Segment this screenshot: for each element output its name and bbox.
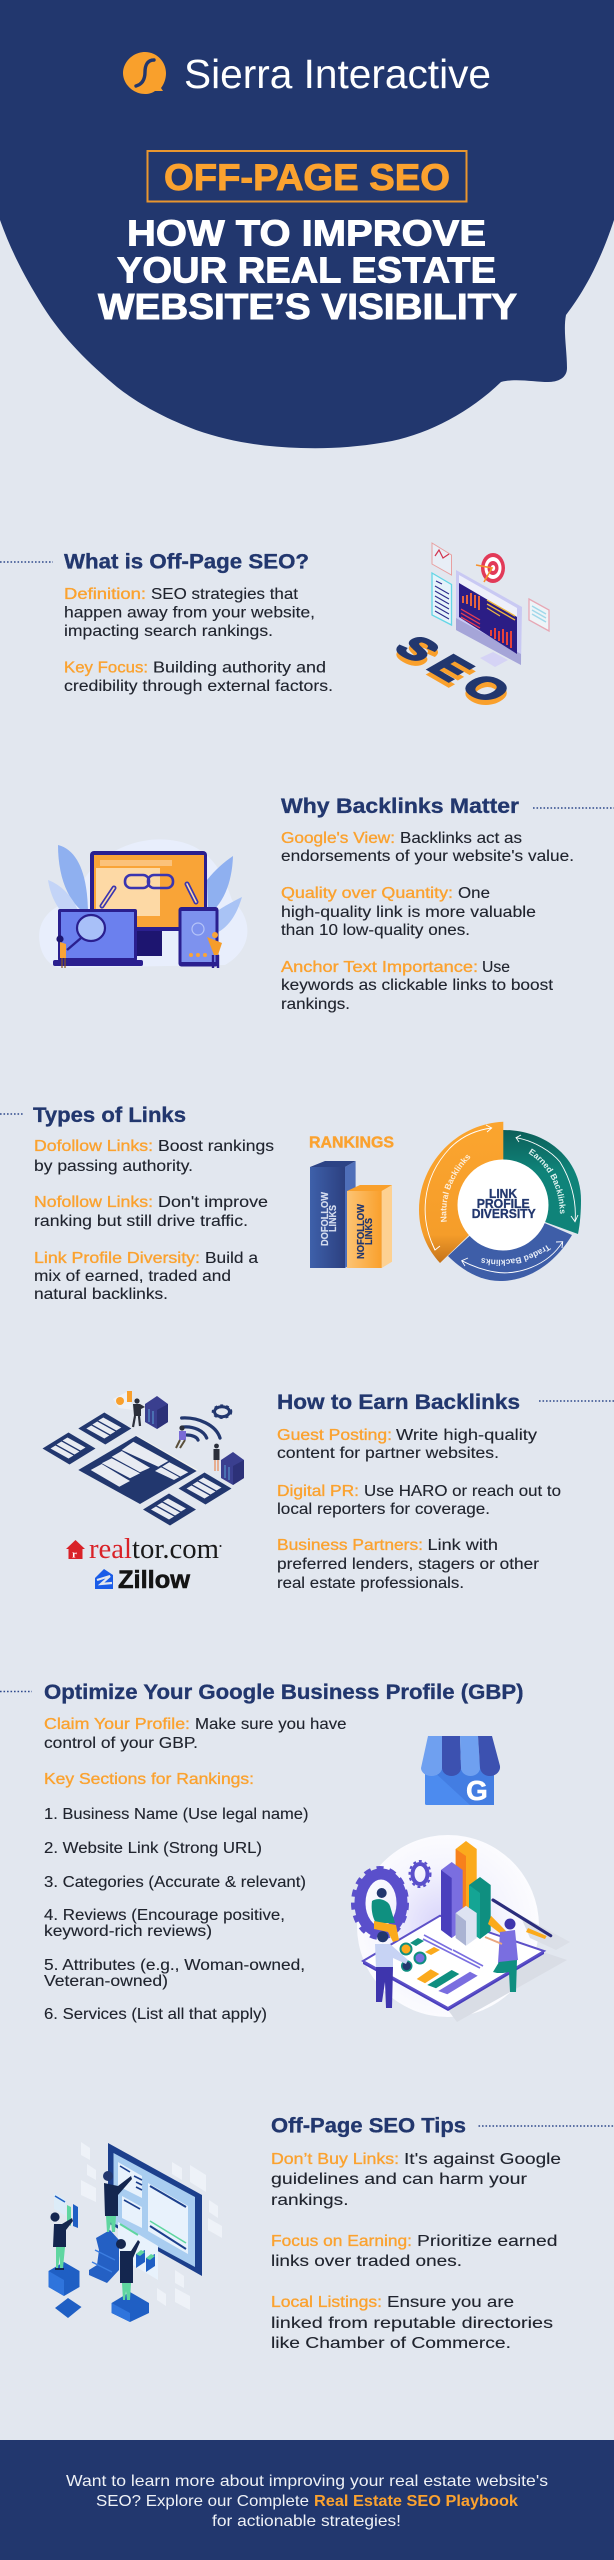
anchor text importance text: rankings. [281,996,350,1013]
badge: off-page seo: OFF-PAGE SEO [164,157,450,198]
small gear [410,1861,430,1887]
claim your profile text [44,1716,347,1752]
numbered list: 2. Website Link (Strong URL) [44,1840,262,1857]
wheel centre label: DIVERSITY [472,1207,536,1221]
illustration: linked devices [39,839,247,968]
label: earned backlinks: Earned Backlinks [528,1148,566,1214]
chart: rankings bars: LINKS [328,1205,339,1232]
illustration: team at big screen [48,2142,222,2322]
wheel centre label [472,1187,536,1221]
numbered list: keyword-rich reviews) [44,1923,212,1940]
header panel [0,0,614,448]
nofollow text: Nofollow Links: [34,1194,153,1211]
numbered list: 6. Services (List all that apply) [44,2006,267,2023]
guest posting text: Write high-quality [396,1427,537,1444]
heading: Optimize Your Google Business Profile (GBP) [44,1680,524,1704]
anchor text importance text: Use [482,959,510,976]
seo 3d letters: SEO [383,630,521,709]
key focus text [64,660,333,695]
person: standing right [485,1918,518,1992]
numbered list [44,1806,308,2023]
focus on earning text [271,2233,558,2270]
definition text: SEO strategies that [151,586,299,603]
section: why backlinks matter [39,794,614,1013]
numbered list: 1. Business Name (Use legal name) [44,1806,308,1823]
focus on earning text: links over traded ones. [271,2253,462,2270]
link profile diversity text: Link Profile Diversity: [34,1250,200,1267]
don't buy links text: rankings. [271,2192,348,2209]
numbered list: Veteran-owned) [44,1973,168,1990]
person: seated with laptop [176,1425,186,1448]
business partners text: real estate professionals. [277,1575,464,1592]
anchor text importance text [281,959,554,1013]
person: sitting analyst [372,1888,399,1942]
business partners text: preferred lenders, stagers or other [277,1556,540,1573]
footer call to action text [66,2473,548,2530]
icon: google business store [421,1736,500,1806]
heading: Why Backlinks Matter [281,794,520,818]
illustration: isometric network [42,1391,244,1526]
logo: realtor.com: tor.com [132,1534,219,1565]
link profile diversity text: Build a [205,1250,258,1267]
local listings text: Ensure you are [387,2294,514,2311]
key focus text: Building authority and [153,660,326,676]
main title: HOW TO IMPROVE [127,212,486,254]
nofollow text: Don't improve [158,1194,268,1211]
heading: What is Off-Page SEO? [64,550,309,574]
google's view text: endorsements of your website's value. [281,848,574,865]
person: on stairs [103,2171,132,2232]
business partners text [277,1537,540,1592]
logo: zillow: Zillow [118,1566,191,1594]
section: what is off-page seo [0,543,549,714]
section: google business profile [0,1680,570,2023]
don't buy links text: Don’t Buy Links: [271,2151,399,2168]
local listings text: like Chamber of Commerce. [271,2335,511,2352]
claim your profile text: control of your GBP. [44,1735,198,1752]
footer call to action text: for actionable strategies! [212,2513,401,2530]
digital pr text: Digital PR: [277,1483,359,1500]
numbered list: 4. Reviews (Encourage positive, [44,1907,285,1924]
navy speech-bubble shape [0,0,614,448]
don't buy links text: guidelines and can harm your [271,2171,528,2188]
wheel centre label: LINK [489,1187,517,1201]
label: natural backlinks: Natural Backlinks [440,1154,470,1222]
heading: Types of Links [33,1103,186,1127]
footer call to action text: SEO? Explore our Complete [96,2493,309,2510]
small held card [54,2193,78,2228]
main title [98,212,517,327]
logo: realtor.com [66,1534,222,1565]
quality over quantity text: One [458,885,490,902]
person: standing woman [214,1444,220,1471]
business partners text: Business Partners: [277,1537,423,1554]
link profile diversity text [34,1250,258,1303]
definition text: Definition: [64,586,146,603]
definition text: happen away from your website, [64,604,315,622]
nofollow text: ranking but still drive traffic. [34,1213,248,1230]
wheel centre label: PROFILE [477,1197,530,1211]
definition text [64,586,315,640]
person: businessman [133,1398,145,1427]
business partners text: Link with [428,1537,498,1554]
section: types of links [0,1103,581,1303]
quality over quantity text: high-quality link is more valuable [281,904,536,921]
numbered list: 5. Attributes (e.g., Woman-owned, [44,1957,305,1974]
chart: link profile diversity wheel [419,1122,581,1281]
footer call to action text: Real Estate SEO Playbook [314,2493,518,2510]
seo 3d letters: SEO [383,635,521,714]
definition text: impacting search rankings. [64,623,273,640]
logo wordmark: Sierra Interactive [184,51,491,97]
claim your profile text: Make sure you have [195,1716,347,1733]
digital pr text: Use HARO or reach out to [364,1483,561,1500]
don't buy links text [271,2151,561,2209]
illustration: analytics platform [353,1835,570,2022]
don't buy links text: It's against Google [404,2151,561,2168]
chart: rankings bars: LINKS [364,1218,375,1245]
digital pr text [277,1483,561,1518]
quality over quantity text: Quality over Quantity: [281,885,453,902]
chart: rankings bars: RANKINGS [309,1135,394,1152]
heading: How to Earn Backlinks [277,1390,520,1414]
guest posting text [277,1427,537,1462]
key sections heading: Key Sections for Rankings: [44,1771,254,1788]
quality over quantity text: than 10 low-quality ones. [281,922,470,939]
google's view text: Backlinks act as [400,830,522,847]
icon: google business store: G [466,1775,488,1806]
logo icon [123,52,166,94]
big gear [353,1868,407,1938]
section: how to earn backlinks [42,1390,614,1594]
section: off-page seo tips [48,2114,614,2352]
person: front on block [116,2239,140,2300]
person: left on block [50,2212,73,2270]
focus on earning text: Focus on Earning: [271,2233,412,2250]
link profile diversity text: natural backlinks. [34,1286,168,1303]
chart: rankings bars: DOFOLLOW [320,1191,331,1246]
numbered list: 3. Categories (Accurate & relevant) [44,1874,306,1891]
dofollow text: by passing authority. [34,1158,193,1175]
chart: rankings bars: NOFOLLOW [356,1203,367,1259]
logo: realtor.com: real [89,1534,132,1565]
chart bars [441,1841,491,1946]
dofollow text: Boost rankings [158,1138,274,1155]
person: standing left [375,1931,408,2008]
heading: Off-Page SEO Tips [271,2114,466,2138]
guest posting text: content for partner websites. [277,1445,499,1462]
quality over quantity text [281,885,536,939]
main title: YOUR REAL ESTATE [117,250,496,290]
key focus text: credibility through external factors. [64,678,333,695]
local listings text: linked from reputable directories [271,2315,553,2332]
guest posting text: Guest Posting: [277,1427,392,1444]
footer call to action text: Want to learn more about improving your real estate website's [66,2473,548,2490]
main title: WEBSITE’S VISIBILITY [98,286,517,327]
dofollow text: Dofollow Links: [34,1138,153,1155]
illustration: seo monitor [383,543,549,714]
claim your profile text: Claim Your Profile: [44,1716,190,1733]
anchor text importance text: keywords as clickable links to boost [281,977,554,994]
nofollow text [34,1194,268,1230]
digital pr text: local reporters for coverage. [277,1501,490,1518]
google's view text: Google's View: [281,830,395,847]
blocks and stairs [48,2230,155,2322]
link profile diversity text: mix of earned, traded and [34,1268,231,1285]
dofollow text [34,1138,274,1175]
label: traded backlinks: Traded Backlinks [481,1245,552,1266]
local listings text [271,2294,553,2352]
local listings text: Local Listings: [271,2294,382,2311]
logo: realtor.com: r [72,1548,77,1560]
key focus text: Key Focus: [64,660,148,676]
anchor text importance text: Anchor Text Importance: [281,959,478,976]
google's view text [281,830,574,865]
chart: rankings bars [309,1135,394,1268]
footer band [0,2440,614,2560]
focus on earning text: Prioritize earned [417,2233,558,2250]
